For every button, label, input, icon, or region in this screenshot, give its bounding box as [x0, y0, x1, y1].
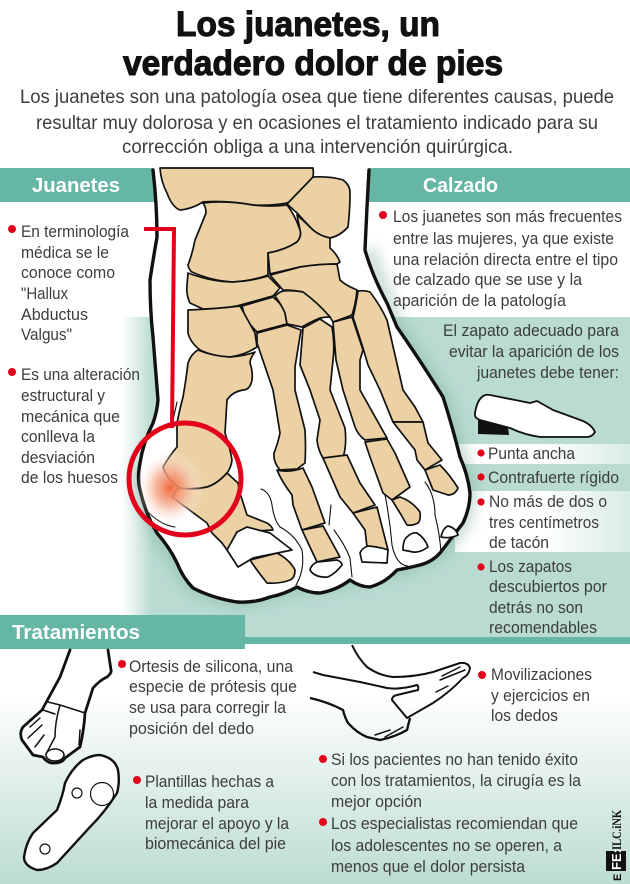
- text block: insoles: [133, 772, 289, 853]
- foot outline: [138, 170, 470, 602]
- text block: mobilisations: los dedos: [491, 706, 558, 725]
- heading band: Tratamientos: Tratamientos: [12, 622, 140, 644]
- list: shoe requirements: Punta ancha: [488, 444, 575, 463]
- credit: EFE ILC.INK: FE:: [609, 849, 624, 870]
- list: shoe requirements: de tacón: [489, 533, 549, 552]
- text block: Juanetes description: estructural y: [21, 386, 105, 405]
- icon: foot exercises: [310, 645, 470, 740]
- intro text: Los juanetes son una patología osea que tiene diferentes causas, puede: [20, 86, 614, 108]
- text block: silicone orthosis: posición del dedo: [129, 719, 254, 738]
- text block: specialists: menos que el dolor persista: [331, 857, 526, 876]
- heading band: Tratamientos: [0, 615, 630, 649]
- list: shoe requirements: No más de dos o: [489, 492, 607, 511]
- text block: Juanetes description: Es una alteración: [21, 365, 140, 384]
- text block: mobilisations: y ejercicios en: [491, 686, 590, 705]
- text block: Juanetes description: de los huesos: [21, 468, 118, 487]
- text block: silicone orthosis: especie de prótesis que: [129, 677, 297, 696]
- text block: silicone orthosis: Ortesis de silicona, una: [129, 657, 294, 676]
- foot fill: [138, 168, 470, 602]
- text block: specialists: los adolescentes no se operen, a: [331, 836, 562, 855]
- list: shoe requirements: recomendables: [489, 618, 597, 637]
- text block: surgery: con los tratamientos, la cirugía es la: [331, 771, 582, 790]
- text block: proper shoe intro: juanetes debe tener:: [476, 363, 619, 382]
- callout: red highlight circle and leader line: [129, 229, 241, 535]
- text block: Calzado: entre las mujeres, ya que existe: [393, 229, 614, 248]
- heading band: Calzado: Calzado: [423, 175, 498, 197]
- toe nails and bandage: [227, 526, 458, 577]
- bones of the ankle and tarsus: [160, 168, 357, 357]
- list: shoe requirements: tres centímetros: [489, 513, 599, 532]
- text block: Juanetes definition: "Hallux: [21, 284, 68, 303]
- title: verdadero dolor de pies: [123, 44, 503, 83]
- text block: proper shoe intro: evitar la aparición de los: [449, 342, 619, 361]
- metatarsals: [163, 291, 423, 489]
- credit: EFE ILC.INK: E: [612, 874, 624, 881]
- foot shadow: [140, 250, 470, 602]
- text block: Juanetes definition: Abductus: [21, 305, 88, 324]
- text block: Juanetes description: mecánica que: [21, 407, 120, 426]
- text block: Calzado: una relación directa entre el tipo: [393, 250, 618, 269]
- list: shoe requirements: Contrafuerte rígido: [488, 468, 619, 487]
- intro text: resultar muy dolorosa y en ocasiones el tratamiento indicado para su: [36, 112, 598, 134]
- text block: proper shoe intro: El zapato adecuado para: [443, 321, 619, 340]
- text block: insoles: biomecánica del pie: [145, 834, 286, 853]
- list: shoe requirements: [477, 444, 619, 637]
- list: shoe requirements: Los zapatos: [489, 557, 572, 576]
- text block: Calzado: de calzado que se use y la: [393, 270, 583, 289]
- text block: Juanetes definition: [8, 222, 129, 344]
- toe phalanges: [172, 422, 458, 583]
- title: [123, 5, 503, 83]
- icon: foot with silicone orthosis: [21, 650, 111, 763]
- credit: EFE ILC.INK: ILC.iNK: [609, 809, 624, 850]
- text block: insoles: mejorar el apoyo y la: [145, 814, 289, 833]
- credit: EFE ILC.INK: [606, 809, 626, 881]
- text block: silicone orthosis: se usa para corregir la: [129, 698, 287, 717]
- text block: silicone orthosis: [118, 657, 297, 738]
- text block: Juanetes description: desviación: [21, 448, 95, 467]
- list: shoe requirements: descubiertos por: [489, 577, 607, 596]
- list: shoe requirements: detrás no son: [489, 598, 583, 617]
- skin fold lines: [146, 402, 441, 585]
- icon: shoe: [475, 395, 595, 437]
- text block: specialists: [319, 814, 578, 876]
- text block: surgery: Si los pacientes no han tenido éxito: [331, 750, 578, 769]
- intro text: [20, 86, 614, 158]
- text block: Juanetes definition: Valgus": [21, 325, 72, 344]
- heading band: Calzado: [367, 168, 630, 202]
- panel: teal area behind foot: [122, 317, 630, 637]
- text block: Calzado: [379, 207, 622, 310]
- background: bottom gradient: [0, 695, 630, 884]
- text block: Juanetes definition: conoce como: [21, 263, 115, 282]
- text block: Juanetes definition: médica se le: [21, 243, 109, 262]
- panel: white recommendation bands: [455, 444, 630, 552]
- intro text: corrección obliga a una intervención quirúrgica.: [122, 136, 513, 158]
- text block: Juanetes definition: En terminología: [21, 222, 129, 241]
- text block: surgery: mejor opción: [331, 792, 422, 811]
- icon: insole: [24, 755, 119, 870]
- text block: surgery: [319, 750, 582, 811]
- text block: Juanetes description: [8, 365, 140, 487]
- heading band: Juanetes: Juanetes: [32, 175, 120, 197]
- text block: insoles: Plantillas hechas a: [145, 772, 274, 791]
- heading band: Juanetes: [0, 168, 155, 202]
- text block: Juanetes description: conlleva la: [21, 427, 96, 446]
- text block: mobilisations: Movilizaciones: [491, 665, 592, 684]
- text block: Calzado: aparición de la patología: [393, 291, 567, 310]
- text block: specialists: Los especialistas recomiendan que: [331, 814, 578, 833]
- illustration: foot skeleton: [138, 168, 470, 602]
- text block: proper shoe intro: [443, 321, 619, 382]
- title: Los juanetes, un: [176, 5, 440, 44]
- text block: mobilisations: [478, 665, 592, 725]
- text block: insoles: la medida para: [145, 793, 249, 812]
